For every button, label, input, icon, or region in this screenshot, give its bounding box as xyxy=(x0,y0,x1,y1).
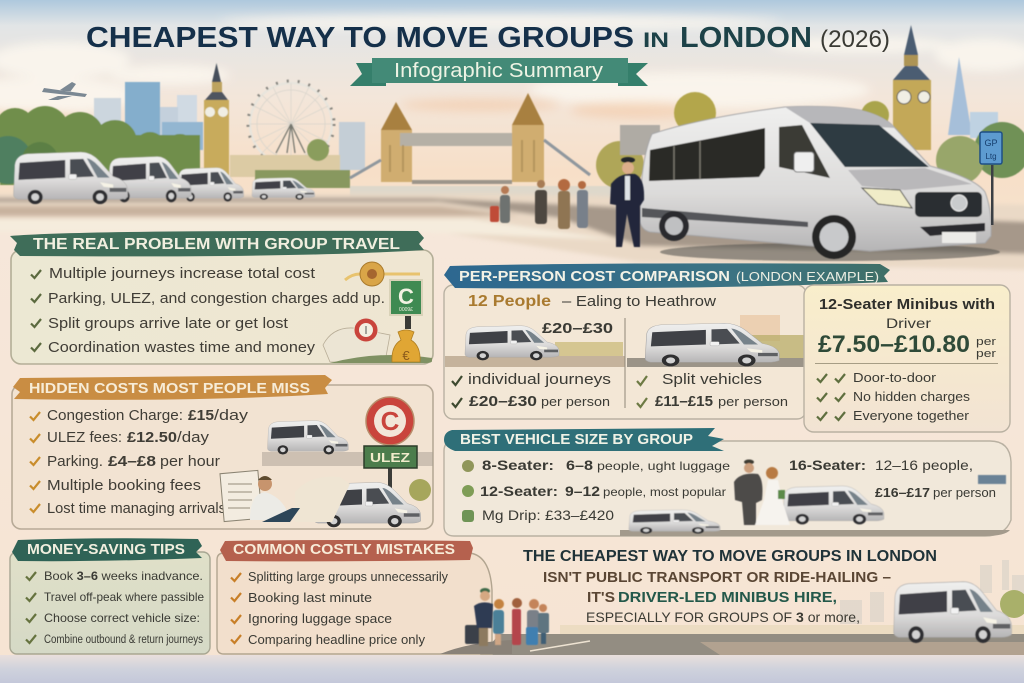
row: 12-seater: 12-Seater: xyxy=(480,483,558,499)
list: hidden costs: /day xyxy=(177,430,210,446)
list: tips: Combine outbound & return journeys xyxy=(44,634,203,646)
list: problems: Coordination wastes time and money xyxy=(48,340,316,356)
bus stop sign xyxy=(980,132,1002,225)
row: 8-seater: 8-Seater: xyxy=(482,457,554,473)
panel: common costly mistakes xyxy=(217,540,512,654)
trees mid right xyxy=(674,92,716,134)
buildings left xyxy=(94,98,121,136)
heading: mistakes xyxy=(220,540,473,561)
list: hidden costs: Multiple booking fees xyxy=(47,478,201,494)
heading: tips: MONEY-SAVING TIPS xyxy=(27,542,185,558)
heading: real problem xyxy=(10,231,424,256)
option: individual journeys: per person xyxy=(541,394,610,409)
heading: cost comparison xyxy=(444,263,890,288)
title: LONDON xyxy=(680,22,812,54)
list: problems xyxy=(31,266,385,356)
option: split vehicles xyxy=(637,323,788,410)
title: CHEAPEST WAY TO MOVE GROUPS xyxy=(86,22,634,54)
panel: money-saving tips xyxy=(10,538,210,654)
big ben left xyxy=(204,63,229,175)
heading: cost comparison: (LONDON EXAMPLE) xyxy=(736,269,879,284)
row: 12-seater: 9–12 xyxy=(565,483,600,499)
list: tips: Travel off-peak where passible xyxy=(44,590,204,604)
option: split vehicles: £11–£15 xyxy=(655,394,713,410)
group of travellers xyxy=(490,179,588,229)
row: 8-seater: people, ught luggage xyxy=(597,459,730,473)
option: split vehicles: per person xyxy=(718,394,788,409)
heading: real problem: THE REAL PROBLEM WITH GROUP TRAVEL xyxy=(33,236,400,253)
city buildings by river xyxy=(230,155,340,177)
subtitle ribbon: Infographic Summary xyxy=(394,60,603,82)
header illustration: London skyline scene xyxy=(0,0,1024,270)
panel: the real problem with group travel xyxy=(10,231,433,364)
row: 8-seater xyxy=(462,457,730,473)
closing statement: ESPECIALLY FOR GROUPS OF 3 or more, xyxy=(586,609,860,625)
panel: per-person cost comparison xyxy=(444,263,1010,432)
list: hidden costs: £12.50 xyxy=(127,430,177,446)
option: individual journeys: individual journeys xyxy=(468,371,611,388)
heading: tips xyxy=(12,538,202,561)
heading: mistakes: COMMON COSTLY MISTAKES xyxy=(233,542,455,558)
trees left xyxy=(0,106,200,185)
list: hidden costs: £4–£8 xyxy=(108,454,156,470)
illustration: vans and charge signs: C xyxy=(381,406,400,436)
row: 12-seater xyxy=(462,483,726,499)
chauffeur xyxy=(610,157,644,247)
bottom band xyxy=(0,655,1024,683)
list: tips: Choose correct vehicle size: xyxy=(44,611,200,625)
bus stop sign: GP xyxy=(984,138,998,148)
icons: charges and money: 0009£ xyxy=(399,307,413,313)
title: IN xyxy=(643,29,669,52)
list: mistakes: Booking last minute xyxy=(248,590,372,605)
icons: charges and money xyxy=(323,262,432,363)
option: individual journeys: £20–£30 xyxy=(469,394,537,410)
closing statement xyxy=(523,548,937,625)
option: individual journeys: £20–£30 xyxy=(542,320,613,337)
title xyxy=(86,22,890,54)
row: 16-seater: 16-Seater: xyxy=(789,457,866,473)
callout: 12-seater minibus with driver xyxy=(804,285,1010,432)
closing scene background xyxy=(480,560,1024,655)
tower bridge xyxy=(350,93,590,184)
list: tips xyxy=(26,569,204,646)
heading: hidden costs xyxy=(13,375,332,400)
icons: charges and money: € xyxy=(402,348,410,363)
scenery strip behind vans xyxy=(445,315,805,367)
callout: 12-seater minibus with driver: Everyone together xyxy=(853,408,970,423)
list: hidden costs: Lost time managing arrivals xyxy=(47,501,226,517)
route label: – Ealing to Heathrow xyxy=(562,293,716,310)
minibus at bottom right xyxy=(894,582,1012,643)
list: hidden costs: ULEZ fees: xyxy=(47,430,122,446)
list: problems: Split groups arrive late or get lost xyxy=(48,316,288,332)
divider xyxy=(624,318,626,408)
title: (2026) xyxy=(820,26,890,53)
panel: hidden costs xyxy=(12,375,433,529)
list: hidden costs: /day xyxy=(214,408,249,424)
illustration: vans and wedding couple xyxy=(629,460,1006,534)
subtitle ribbon xyxy=(350,58,648,86)
callout: 12-seater minibus with driver: Door-to-door xyxy=(853,370,937,385)
row: 16-seater: per person xyxy=(933,486,996,500)
bus stop sign: Ltg xyxy=(985,152,997,161)
trees right xyxy=(974,122,1024,178)
option: split vehicles: Split vehicles xyxy=(662,371,762,388)
airplane xyxy=(42,82,87,100)
list: tips: Book 3–6 weeks inadvance. xyxy=(44,569,203,583)
list: hidden costs: per hour xyxy=(160,454,220,470)
list: mistakes: Splitting large groups unnecessarily xyxy=(248,569,448,584)
list: hidden costs: Parking. xyxy=(47,454,103,470)
ferris wheel xyxy=(248,81,334,167)
illustration: vans and charge signs: ULEZ xyxy=(370,450,410,465)
travelling family xyxy=(465,588,549,646)
list: problems: Multiple journeys increase total cost xyxy=(49,266,315,282)
callout: 12-seater minibus with driver: No hidden charges xyxy=(853,389,971,404)
big ben right xyxy=(893,25,931,150)
main minibus xyxy=(640,106,1000,261)
list: mistakes: Ignoring luggage space xyxy=(248,611,392,626)
option: individual journeys xyxy=(452,320,613,410)
row: 16-seater xyxy=(789,457,996,500)
row: 12-seater: people, most popular xyxy=(603,485,726,499)
row: 16-seater: 12–16 people, xyxy=(875,457,973,473)
route label: 12 People xyxy=(468,293,551,310)
closing statement: ISN'T PUBLIC TRANSPORT OR RIDE-HAILING – xyxy=(543,569,891,586)
row: 8-seater: 6–8 xyxy=(566,457,593,473)
closing statement: DRIVER-LED MINIBUS HIRE, xyxy=(618,589,837,606)
callout: 12-seater minibus with driver: £7.50–£10.80 xyxy=(818,331,970,358)
river xyxy=(350,186,670,210)
route label xyxy=(468,293,716,310)
list: mistakes: Comparing headline price only xyxy=(248,632,425,647)
heading: best vehicle size: BEST VEHICLE SIZE BY GROUP xyxy=(460,432,693,448)
illustration: vans and charge signs xyxy=(220,397,433,527)
heading: best vehicle size xyxy=(444,428,724,451)
list: hidden costs xyxy=(30,408,249,517)
callout: 12-seater minibus with driver: per xyxy=(976,348,996,360)
callout: 12-seater minibus with driver: 12-Seater Minibus with xyxy=(819,297,995,313)
list: hidden costs: £15 xyxy=(188,408,214,424)
fleet of vans on the left xyxy=(14,152,315,204)
icons: charges and money: C xyxy=(398,284,414,309)
list: hidden costs: Congestion Charge: xyxy=(47,408,183,424)
callout: 12-seater minibus with driver: Driver xyxy=(886,315,931,331)
row: mg drip: Mg Drip: £33–£420 xyxy=(482,507,614,523)
panel: best vehicle size by group xyxy=(444,428,1011,536)
row: 16-seater: £16–£17 xyxy=(875,485,930,500)
list: problems: Parking, ULEZ, and congestion charges add up. xyxy=(48,291,385,307)
heading: cost comparison: PER-PERSON COST COMPARISON xyxy=(459,268,730,285)
heading: hidden costs: HIDDEN COSTS MOST PEOPLE MISS xyxy=(29,381,310,397)
ground xyxy=(0,194,1024,270)
shard xyxy=(948,57,972,135)
list: mistakes xyxy=(231,569,448,647)
closing statement: THE CHEAPEST WAY TO MOVE GROUPS IN LONDON xyxy=(523,548,937,565)
closing statement: IT'S xyxy=(587,589,615,606)
callout: 12-seater minibus with driver: per xyxy=(976,336,996,348)
